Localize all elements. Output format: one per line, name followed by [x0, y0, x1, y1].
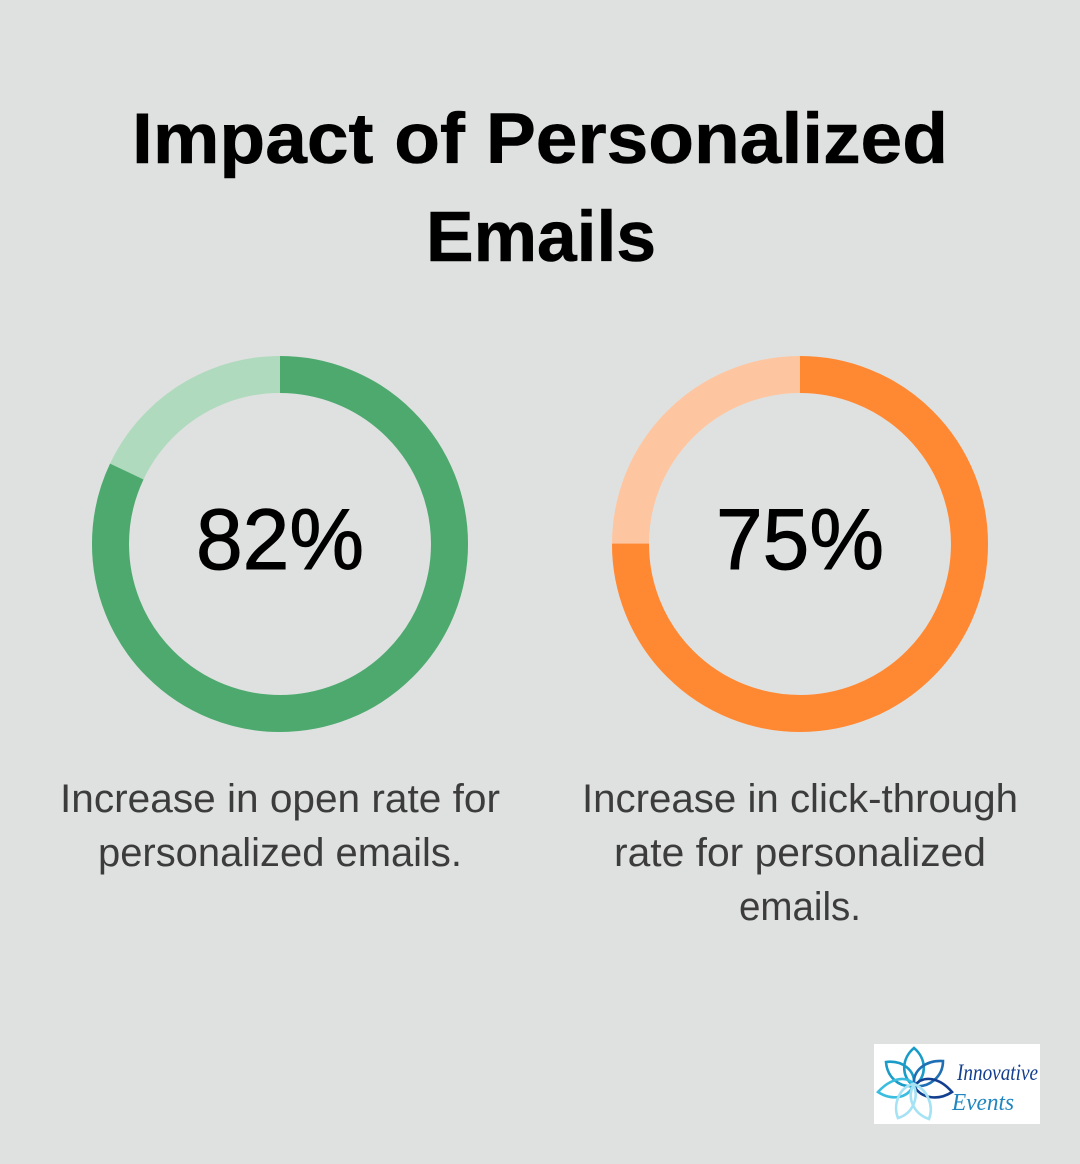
description: open rate: [60, 777, 500, 875]
description: click-through rate: emails.: [739, 885, 861, 929]
description: click-through rate: Increase in click-through: [582, 777, 1018, 821]
logo wordmark: Innovative: [956, 1060, 1038, 1085]
title: [132, 100, 948, 277]
value: 75%: 75%: [716, 492, 884, 588]
panel: open rate stat: [60, 374, 500, 875]
logo wordmark: [951, 1060, 1038, 1116]
donut chart: 82%: [110, 374, 450, 714]
title: Emails: [426, 198, 656, 277]
description: click-through rate: rate for personalized: [614, 831, 986, 875]
icon: lotus flower: [878, 1048, 952, 1119]
donut chart: 75%: [630, 374, 970, 714]
logo: Innovative Events: [874, 1044, 1040, 1124]
description: open rate: personalized emails.: [98, 831, 462, 875]
logo wordmark: Events: [951, 1090, 1014, 1116]
description: click-through rate: [582, 777, 1018, 929]
value: 82%: 82%: [196, 492, 364, 588]
description: open rate: Increase in open rate for: [60, 777, 500, 821]
panel: click-through rate stat: [582, 374, 1018, 929]
title: Impact of Personalized: [132, 100, 948, 179]
